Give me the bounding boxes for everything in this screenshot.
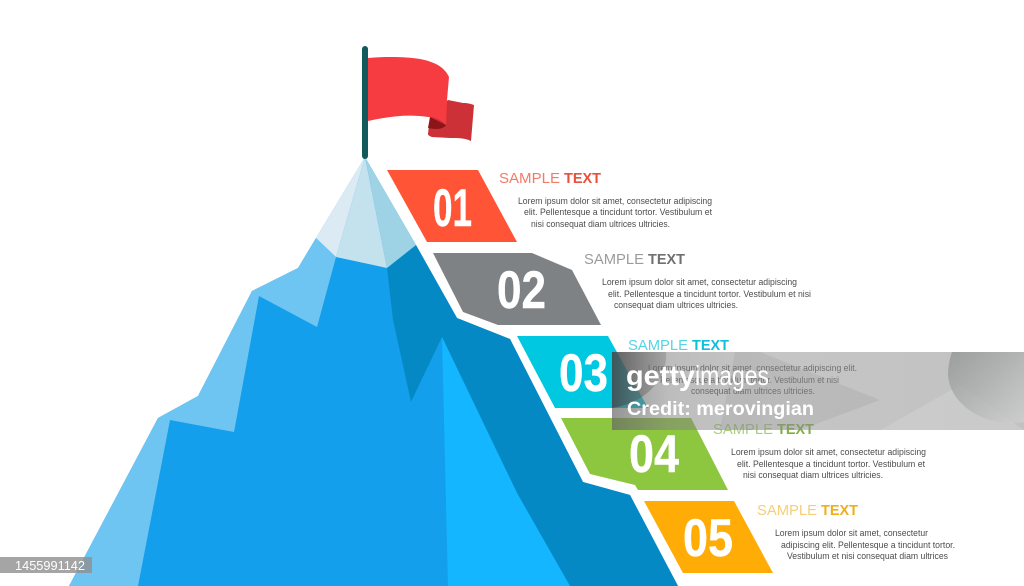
heading 05: SAMPLE: [757, 502, 817, 519]
body 05: adipiscing elit. Pellentesque a tincidunt tortor.: [781, 540, 955, 550]
step 02: [433, 251, 811, 325]
body 03: consequat diam ultrices ultricies.: [691, 386, 815, 396]
heading 01: SAMPLE: [499, 170, 560, 187]
heading 01: TEXT: [564, 170, 601, 187]
watermark orb: [948, 352, 1024, 423]
step 04: [561, 418, 926, 490]
credit text: Credit: merovingian: [627, 399, 814, 420]
heading 05: TEXT: [821, 502, 858, 519]
heading 02: SAMPLE: [584, 251, 644, 268]
heading 03: TEXT: [692, 337, 729, 354]
body 01: nisi consequat diam ultrices ultricies.: [531, 219, 670, 229]
flag front: [368, 57, 449, 125]
snow right facet: [365, 157, 416, 268]
body 03: Lorem ipsum dolor sit amet, consectetur adipiscing elit.: [648, 363, 857, 373]
snow middle facet: [336, 157, 387, 268]
step 01: [387, 170, 713, 242]
body 04: Lorem ipsum dolor sit amet, consectetur adipiscing: [731, 447, 926, 457]
flag: [362, 46, 474, 159]
heading 04: SAMPLE: [713, 421, 773, 438]
number 01: 01: [433, 179, 472, 238]
body 05: Lorem ipsum dolor sit amet, consectetur: [775, 528, 928, 538]
step 03: [517, 336, 857, 408]
body 04: elit. Pellentesque a tincidunt tortor. Vestibulum et: [737, 459, 926, 469]
heading 02: TEXT: [648, 251, 685, 268]
mountain: [69, 157, 678, 586]
gettyimages text: getty: [626, 360, 695, 391]
light blue left facets: [69, 238, 336, 586]
heading 04: TEXT: [777, 421, 814, 438]
body 02: Lorem ipsum dolor sit amet, consectetur adipiscing: [602, 277, 797, 287]
body 01: elit. Pellentesque a tincidunt tortor. Vestibulum et: [524, 207, 713, 217]
gettyimages text: images: [695, 360, 769, 391]
body 01: Lorem ipsum dolor sit amet, consectetur adipiscing: [518, 196, 712, 206]
image id tag: [0, 557, 92, 573]
flag back tail: [428, 100, 474, 141]
number 04: 04: [629, 425, 679, 484]
flag pole: [362, 46, 368, 159]
heading 03: SAMPLE: [628, 337, 688, 354]
body 04: nisi consequat diam ultrices ultricies.: [743, 470, 883, 480]
image id tag: 1455991142: [15, 559, 85, 573]
watermark band: [612, 352, 1024, 430]
body 03: Pellentesque a tincidunt tortor. Vestibulum et nisi: [660, 375, 839, 385]
body 05: Vestibulum et nisi consequat diam ultrices: [787, 551, 949, 561]
number 05: 05: [683, 509, 733, 568]
body 02: elit. Pellentesque a tincidunt tortor. Vestibulum et nisi: [608, 289, 811, 299]
dark blue right face: [387, 245, 678, 586]
body 02: consequat diam ultrices ultricies.: [614, 300, 738, 310]
bright blue facet: [442, 337, 570, 586]
number 03: 03: [559, 344, 608, 403]
number 02: 02: [497, 261, 546, 320]
step 05: [644, 501, 955, 573]
flag fold shadow: [428, 117, 446, 129]
snow left facet: [316, 157, 365, 257]
